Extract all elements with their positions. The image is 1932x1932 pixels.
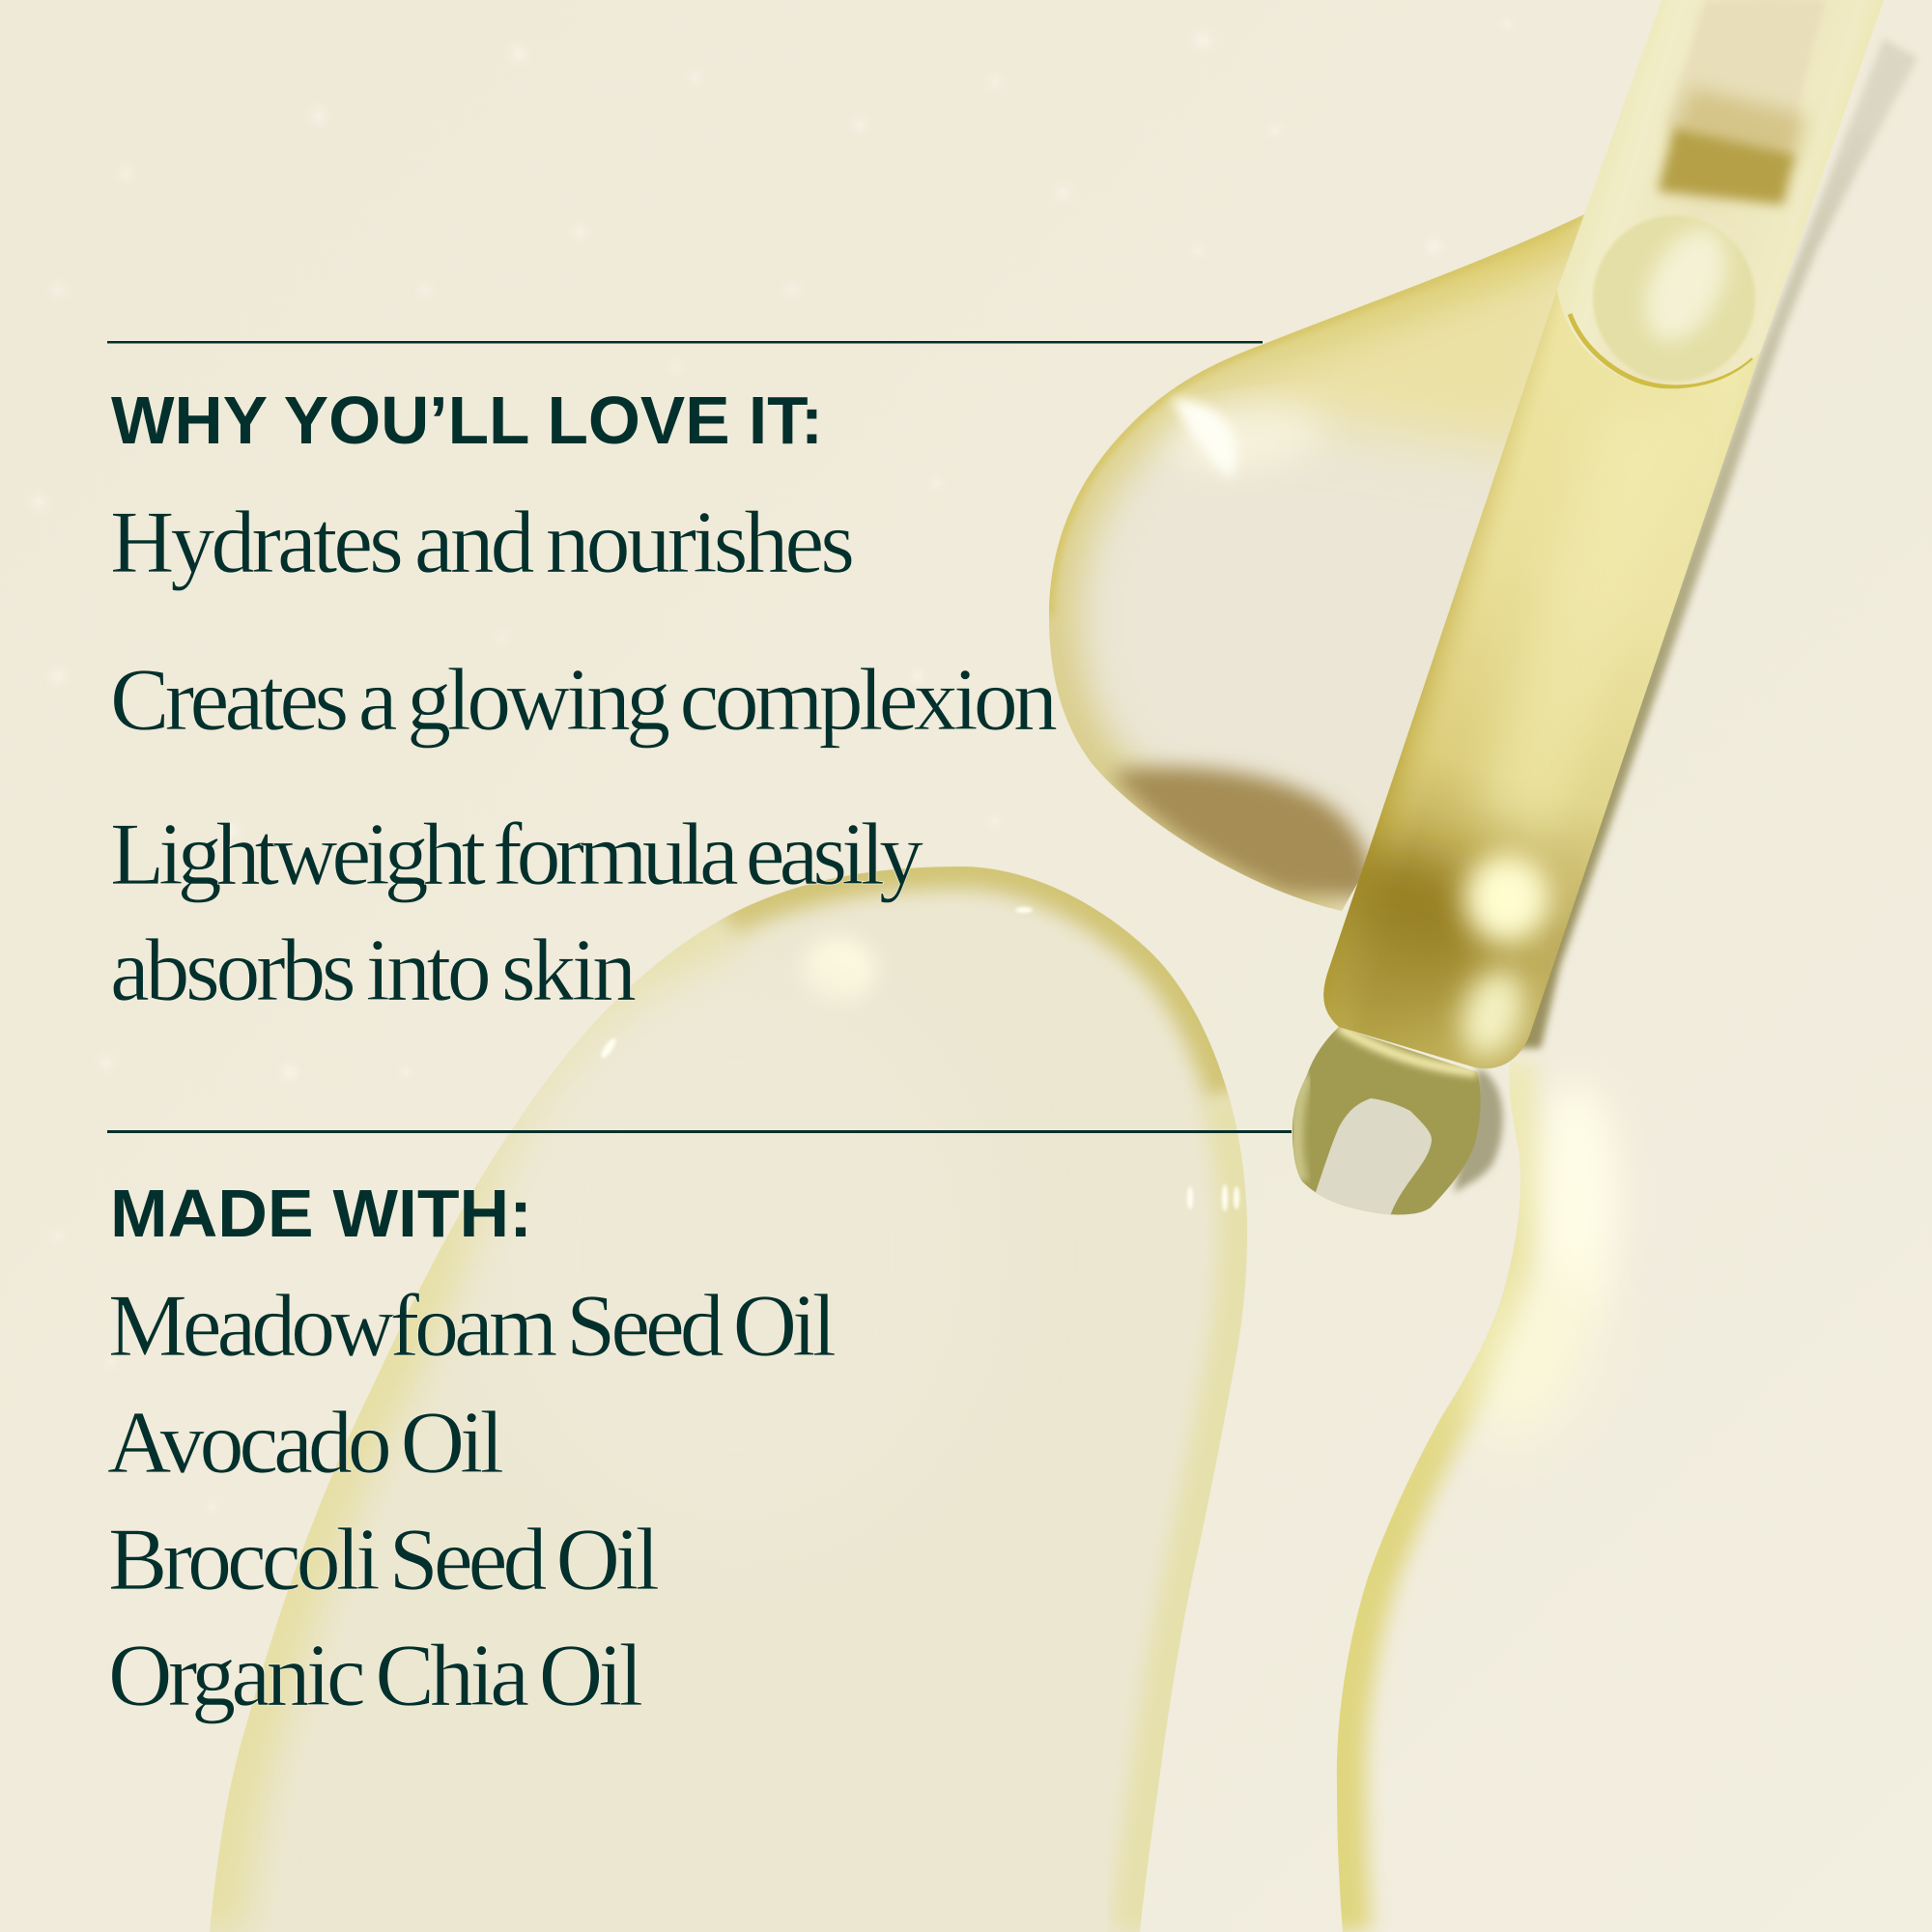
lower drop rim	[210, 918, 724, 1932]
benefit: hydrates: Hydrates and nourishes	[110, 493, 855, 591]
body mid sheen	[1478, 406, 1700, 840]
lower drop right rim	[1140, 1096, 1247, 1932]
upper drop brown shadow	[1111, 767, 1377, 898]
benefit: glowing complexion: Creates a glowing complexion	[110, 650, 1058, 749]
heading: why you'll love it: WHY YOU’LL LOVE IT:	[111, 383, 823, 458]
tube dark golden band	[1658, 128, 1795, 205]
divider: top	[107, 341, 1263, 344]
text panel: ingredients	[107, 1130, 1292, 1724]
meniscus highlight	[1629, 216, 1743, 354]
tube liquid meniscus	[1593, 215, 1755, 382]
benefit: lightweight formula, two lines: Lightweight formula easily	[110, 805, 923, 903]
upper drop golden wash	[1219, 228, 1578, 473]
body edge shading	[1314, 280, 1777, 1082]
oil drop: lower left	[193, 850, 1265, 1932]
upper drop crisp edge	[1049, 214, 1584, 616]
tube inner clear column	[1666, 0, 1826, 164]
pipette glass tube	[1546, 0, 1893, 396]
upper drop highlight	[1171, 398, 1236, 478]
oil drop: lower right	[1337, 1060, 1621, 1932]
divider: middle	[107, 1130, 1292, 1133]
background sparkles	[32, 18, 1513, 1513]
shadow cast by the pipette	[1507, 39, 1918, 1048]
text panel: benefits	[107, 341, 1263, 1019]
right drop rim	[1337, 1060, 1520, 1932]
ingredient: avocado: Avocado Oil	[107, 1393, 504, 1492]
tip pale edge	[1296, 1075, 1307, 1181]
tip white opening	[1314, 1098, 1432, 1219]
heading: made with: MADE WITH:	[110, 1176, 532, 1251]
right drop highlight	[1536, 1082, 1617, 1314]
oil drop: upper	[1049, 214, 1584, 911]
body lower pale patch	[1451, 963, 1534, 1065]
upper drop rim	[1049, 214, 1584, 911]
benefit: lightweight formula, two lines	[110, 805, 923, 1019]
body dark oil band	[1333, 840, 1488, 1034]
lower drop centre sheen	[450, 923, 748, 1279]
ingredient: broccoli: Broccoli Seed Oil	[108, 1510, 660, 1608]
pipette glass body filled with oil	[1314, 280, 1777, 1082]
dropper tip bulb	[1293, 1027, 1481, 1215]
right drop lower glow	[1447, 1258, 1573, 1432]
lower drop glints	[599, 907, 1239, 1211]
body bright highlight	[1464, 854, 1549, 943]
benefit: lightweight formula, two lines: absorbs into skin	[110, 921, 637, 1019]
tube bottom gold arc	[1570, 314, 1753, 387]
shadow cast by the tip	[1454, 1067, 1503, 1193]
ingredient: chia: Organic Chia Oil	[108, 1626, 643, 1724]
tip rim glow	[1339, 1027, 1477, 1072]
lower drop top rim	[724, 867, 1229, 1096]
lower drop highlight	[808, 937, 874, 995]
ingredient: meadowfoam: Meadowfoam Seed Oil	[108, 1276, 837, 1375]
tube dark golden band fade	[1671, 87, 1806, 164]
upper drop highlight glow	[1165, 392, 1321, 461]
